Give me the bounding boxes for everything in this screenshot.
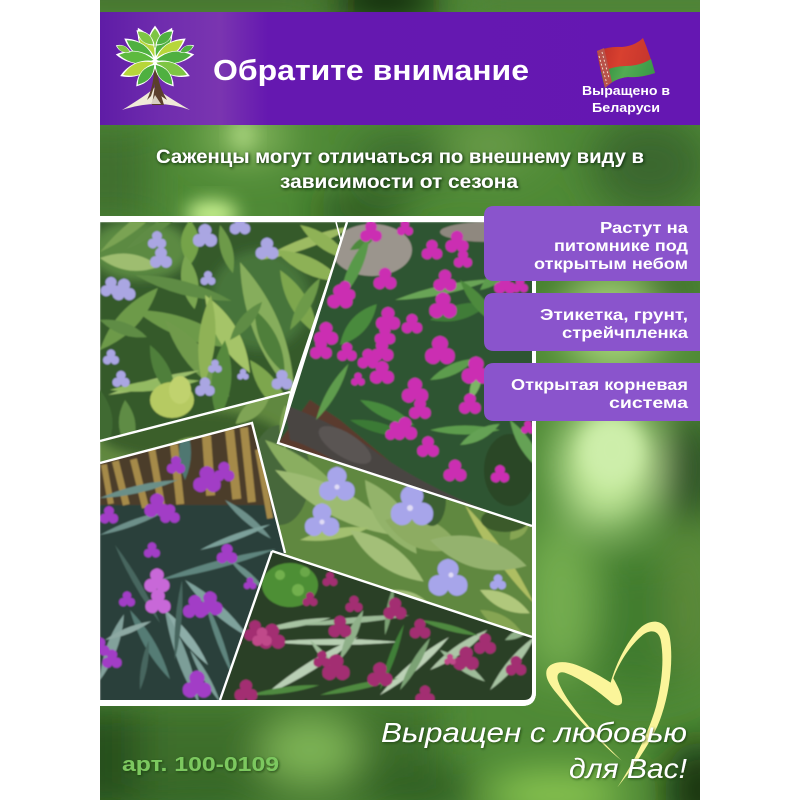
tagline	[381, 717, 687, 784]
icon: Belarus flag	[597, 38, 655, 88]
callouts: feature labels	[484, 206, 700, 421]
callout: label, soil, stretch film	[484, 293, 700, 351]
photo: light purple spiderwort (background layer)	[100, 389, 540, 650]
callout: open-air nursery: Растут на	[600, 220, 688, 237]
background: blurred green bokeh	[100, 0, 700, 800]
header band	[100, 12, 700, 125]
subtitle	[156, 147, 644, 193]
photo: magenta spiderwort	[280, 222, 532, 527]
callout: open root system	[484, 363, 700, 421]
callout: label, soil, stretch film: стрейчпленка	[562, 325, 688, 342]
flag caption	[582, 84, 670, 115]
subtitle: Саженцы могут отличаться по внешнему виду в	[156, 147, 644, 168]
photo: crimson spiderwort	[221, 552, 532, 700]
white dividers between photos	[100, 222, 532, 700]
tagline: Выращен с любовью	[381, 717, 687, 748]
photo collage panel	[88, 192, 548, 706]
callout: open root system: Открытая корневая	[511, 377, 688, 394]
callout: open-air nursery	[484, 206, 700, 281]
subtitle: зависимости от сезона	[280, 172, 518, 193]
icon: yellow heart	[546, 622, 671, 787]
tagline: для Вас!	[569, 753, 687, 784]
flag caption: Выращено в	[582, 84, 670, 98]
photo: purple spiderwort with bamboo	[100, 424, 285, 700]
article number: арт. 100-0109	[122, 754, 279, 776]
flag caption: Беларуси	[592, 101, 660, 115]
callout: open root system: система	[609, 395, 688, 412]
logo: tree	[115, 26, 195, 110]
photo: lavender spiderwort	[100, 222, 346, 440]
callout: open-air nursery: питомнике под	[554, 238, 688, 255]
callout: label, soil, stretch film: Этикетка, грунт,	[540, 307, 688, 324]
callout: open-air nursery: открытым небом	[534, 256, 688, 273]
title: Обратите внимание	[213, 55, 529, 87]
